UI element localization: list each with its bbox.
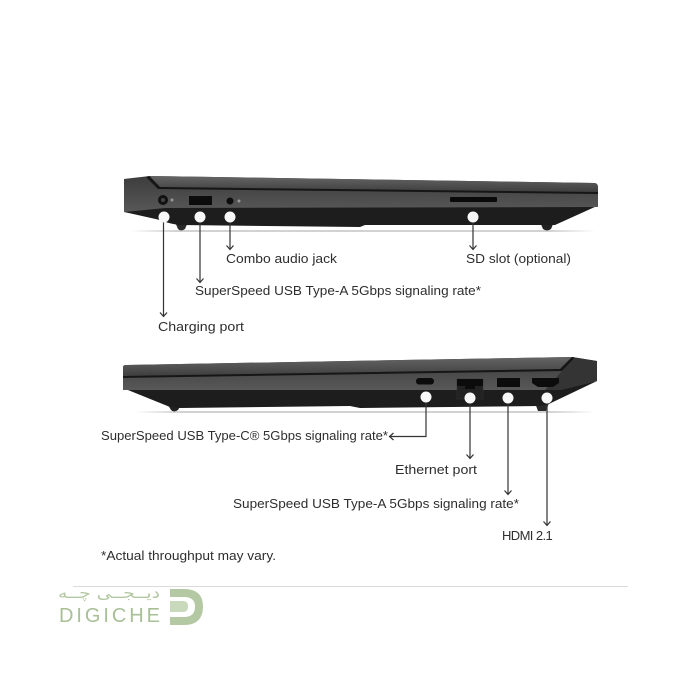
callout: SD slot (466, 212, 571, 266)
callout: USB Type-A: SuperSpeed USB Type-A 5Gbps signaling rate* (233, 496, 519, 511)
callout: HDMI: HDMI 2.1 (502, 528, 552, 543)
logo: Digiche: DIGICHE (59, 605, 160, 627)
callout: charging port (158, 212, 244, 334)
USB-A port (497, 378, 520, 387)
callout: Ethernet port (395, 392, 477, 477)
callout: USB Type-A (194, 212, 481, 298)
logo: Digiche: دیــجــی چــه (58, 584, 160, 602)
callout: HDMI (502, 392, 552, 543)
logo: Digiche (58, 584, 203, 627)
USB-A port (189, 196, 212, 205)
callout: charging port: Charging port (158, 319, 244, 334)
footnote: *Actual throughput may vary. (101, 548, 276, 563)
USB-C port (416, 378, 434, 384)
Ethernet port (457, 379, 483, 399)
charging port (158, 195, 174, 205)
SD slot (450, 197, 497, 202)
callout: USB Type-A (233, 392, 519, 511)
laptop: left side view (124, 176, 598, 232)
callout: audio jack (224, 212, 338, 266)
callout: Ethernet port: Ethernet port (395, 462, 477, 477)
callout: USB Type-C: SuperSpeed USB Type-C® 5Gbps signaling rate* (101, 428, 388, 443)
HDMI port (532, 378, 559, 387)
audio jack (226, 198, 240, 204)
callout: USB Type-A: SuperSpeed USB Type-A 5Gbps signaling rate* (195, 283, 481, 298)
callout: audio jack: Combo audio jack (226, 251, 338, 266)
callout: USB Type-C (101, 392, 432, 443)
laptop: right side view (123, 357, 597, 413)
callout: SD slot: SD slot (optional) (466, 251, 571, 266)
